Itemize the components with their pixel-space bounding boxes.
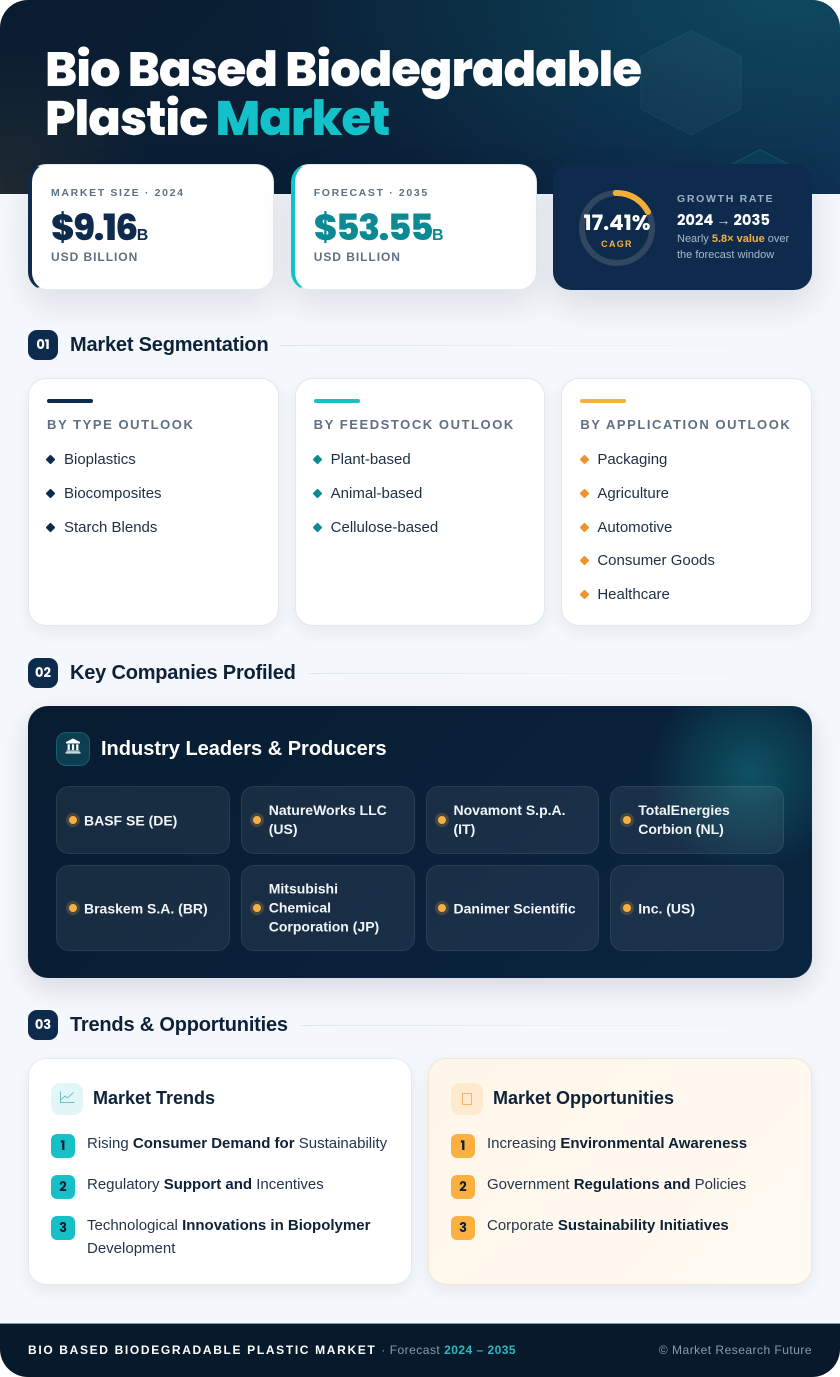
icon: line chart <box>51 1083 83 1115</box>
section heading: Market Segmentation: Market Segmentation <box>70 334 268 356</box>
number badge <box>51 1134 75 1158</box>
list item: Agriculture <box>597 485 669 502</box>
company chip: TotalEnergies Corbion (NL) <box>638 802 730 837</box>
panel: by feedstock outlook: BY FEEDSTOCK OUTLOOK <box>314 417 515 432</box>
list item: Biocomposites <box>64 485 162 502</box>
growth rate text: 2024 → 2035 <box>677 211 770 231</box>
number badge <box>451 1134 475 1158</box>
list item: Automotive <box>597 519 672 536</box>
icon: missing glyph box <box>451 1083 483 1115</box>
icon: decorative hexagon <box>640 30 742 136</box>
number badge: 2 <box>59 1177 67 1196</box>
number badge: 1 <box>461 1136 465 1155</box>
list item: Animal-based <box>331 485 422 502</box>
number badge <box>451 1175 475 1199</box>
growth rate text: GROWTH RATE <box>677 193 774 205</box>
panel: by application outlook: BY APPLICATION OUTLOOK <box>580 417 791 432</box>
trend text: Regulatory Support and Incentives <box>87 1176 324 1193</box>
CAGR ring chart: CAGR <box>601 239 633 249</box>
title: Plastic Market <box>45 84 389 152</box>
company chip <box>56 786 230 854</box>
section heading: Key Companies Profiled: 02 <box>35 663 51 682</box>
header banner <box>0 0 840 194</box>
footer title: BIO BASED BIODEGRADABLE PLASTIC MARKET · Forecast 2024 – 2035 <box>28 1343 516 1357</box>
section heading: Market Segmentation <box>28 330 606 360</box>
number badge: 3 <box>459 1218 467 1237</box>
trend text: Technological Innovations in Biopolymer Development <box>87 1217 370 1256</box>
section heading: Key Companies Profiled: Key Companies Profiled <box>70 662 296 684</box>
section heading: Market Segmentation: 01 <box>36 335 50 354</box>
company chip: NatureWorks LLC (US) <box>269 802 387 837</box>
trend text: Rising Consumer Demand for Sustainability <box>87 1135 387 1152</box>
growth rate text: the forecast window <box>677 249 774 261</box>
number badge <box>451 1216 475 1240</box>
panel: market trends <box>28 1058 412 1285</box>
number badge <box>51 1216 75 1240</box>
company chip: Danimer Scientific <box>454 900 576 916</box>
opportunity text: Government Regulations and Policies <box>487 1176 746 1193</box>
value: 9.16B: $9.16B <box>51 202 148 253</box>
number badge: 1 <box>61 1136 65 1155</box>
list item: Cellulose-based <box>331 519 438 536</box>
company chip <box>426 786 599 854</box>
company chip: Braskem S.A. (BR) <box>84 900 208 916</box>
company chip <box>56 865 230 951</box>
company chip <box>610 865 784 951</box>
stat card: market size 2024: USD BILLION <box>51 250 138 264</box>
company chip: Inc. (US) <box>638 900 695 916</box>
panel heading: Market Trends <box>93 1088 215 1108</box>
CAGR ring chart: 17.41% <box>584 207 651 238</box>
company chip: Novamont S.p.A. (IT) <box>454 802 566 837</box>
panel: by application outlook <box>561 378 812 626</box>
panel: by feedstock outlook <box>295 378 545 626</box>
company chip <box>426 865 599 951</box>
number badge <box>51 1175 75 1199</box>
company chip <box>241 865 414 951</box>
list item: Consumer Goods <box>597 552 715 569</box>
opportunity text: Increasing Environmental Awareness <box>487 1135 747 1152</box>
list item: Plant-based <box>331 451 411 468</box>
number badge: 3 <box>59 1218 67 1237</box>
list item: Packaging <box>597 451 667 468</box>
opportunity text: Corporate Sustainability Initiatives <box>487 1217 729 1234</box>
panel: industry leaders <box>28 706 812 978</box>
icon: bank building <box>56 732 90 766</box>
section heading: Trends and Opportunities: Trends & Opportunities <box>70 1014 288 1036</box>
title: Bio Based Biodegradable <box>45 36 641 102</box>
icon: small decorative hexagon <box>732 149 788 164</box>
company chip <box>241 786 414 854</box>
stat card: forecast 2035: USD BILLION <box>314 250 401 264</box>
CAGR ring chart <box>579 190 655 266</box>
company chip: BASF SE (DE) <box>84 812 177 828</box>
growth rate text: Nearly 5.8× value over <box>677 233 789 245</box>
stat card: market size 2024: MARKET SIZE · 2024 <box>51 187 185 199</box>
panel: by type outlook: BY TYPE OUTLOOK <box>47 417 194 432</box>
title <box>45 36 641 152</box>
section heading: Trends and Opportunities <box>28 1010 614 1040</box>
panel heading: Industry Leaders & Producers <box>101 738 387 760</box>
footer <box>0 1323 840 1377</box>
panel: market opportunities <box>428 1058 812 1285</box>
panel heading: Market Opportunities <box>493 1088 674 1108</box>
company chip <box>610 786 784 854</box>
panel: by type outlook <box>28 378 279 626</box>
growth rate card <box>553 164 812 290</box>
list item: Starch Blends <box>64 519 157 536</box>
list item: Healthcare <box>597 586 670 603</box>
copyright: © Market Research Future <box>659 1343 812 1357</box>
stat card: forecast 2035 <box>291 164 537 290</box>
list item: Bioplastics <box>64 451 136 468</box>
value: 53.55B: $53.55B <box>314 202 444 253</box>
number badge: 2 <box>459 1177 467 1196</box>
section heading: Trends and Opportunities: 03 <box>35 1015 51 1034</box>
stat card: forecast 2035: FORECAST · 2035 <box>314 187 429 199</box>
stat card: market size 2024 <box>28 164 274 290</box>
company chip: Mitsubishi Chemical Corporation (JP) <box>269 880 379 934</box>
section heading: Key Companies Profiled <box>28 658 618 688</box>
growth rate text <box>677 193 789 261</box>
